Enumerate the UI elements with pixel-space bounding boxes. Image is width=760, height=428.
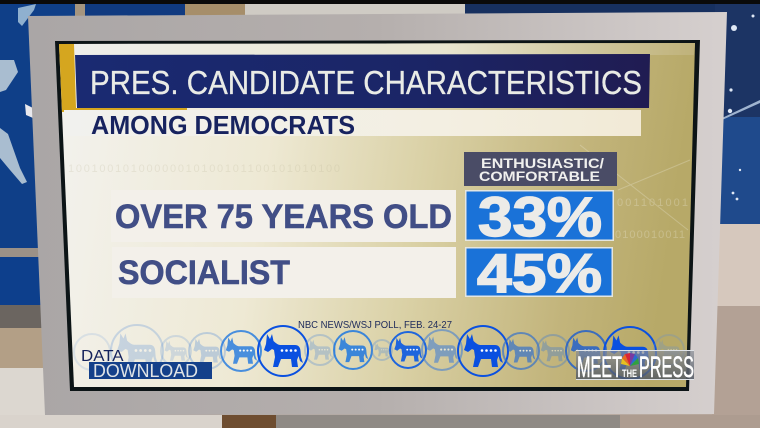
data download logo: DATA_ [81, 348, 134, 365]
row label: socialist [112, 247, 456, 298]
subtitle band: AMONG DEMOCRATS [91, 110, 355, 140]
column header: ENTHUSIASTIC/ [481, 155, 604, 171]
column header [464, 152, 617, 186]
meet the press logo: PRESS [639, 351, 694, 384]
meet the press logo: THE [622, 368, 637, 380]
faint binary background pattern: 10010010100000010100101100101010100 [68, 163, 340, 175]
faint binary background pattern [68, 145, 690, 241]
row label: over 75 years old: OVER 75 YEARS OLD [115, 198, 452, 236]
top light strip [73, 43, 695, 55]
row value: 33 percent: 33% [478, 185, 602, 248]
column header: COMFORTABLE [479, 168, 600, 184]
title bar: PRES. CANDIDATE CHARACTERISTICS [90, 64, 642, 101]
map of the United States on the studio wall [0, 4, 36, 184]
title bar [75, 54, 650, 108]
faint binary background pattern: 0100010011 [615, 229, 685, 241]
gold accent bracket [59, 44, 187, 112]
meet the press logo: MEET [577, 351, 622, 384]
row label: socialist: SOCIALIST [118, 254, 290, 292]
data download logo: DOWNLOAD [93, 361, 198, 381]
source note: NBC NEWS/WSJ POLL, FEB. 24-27 [298, 319, 452, 331]
subtitle band [64, 110, 641, 140]
data download logo [81, 348, 212, 381]
row of donkey icons [74, 325, 684, 379]
meet the press logo [576, 350, 694, 384]
row value: 45 percent: 45% [477, 242, 602, 304]
icon: peacock [621, 353, 639, 366]
monitor screen [55, 40, 700, 391]
starfield on the studio wall [722, 14, 760, 200]
faint binary background pattern: 001101001 [617, 197, 688, 209]
